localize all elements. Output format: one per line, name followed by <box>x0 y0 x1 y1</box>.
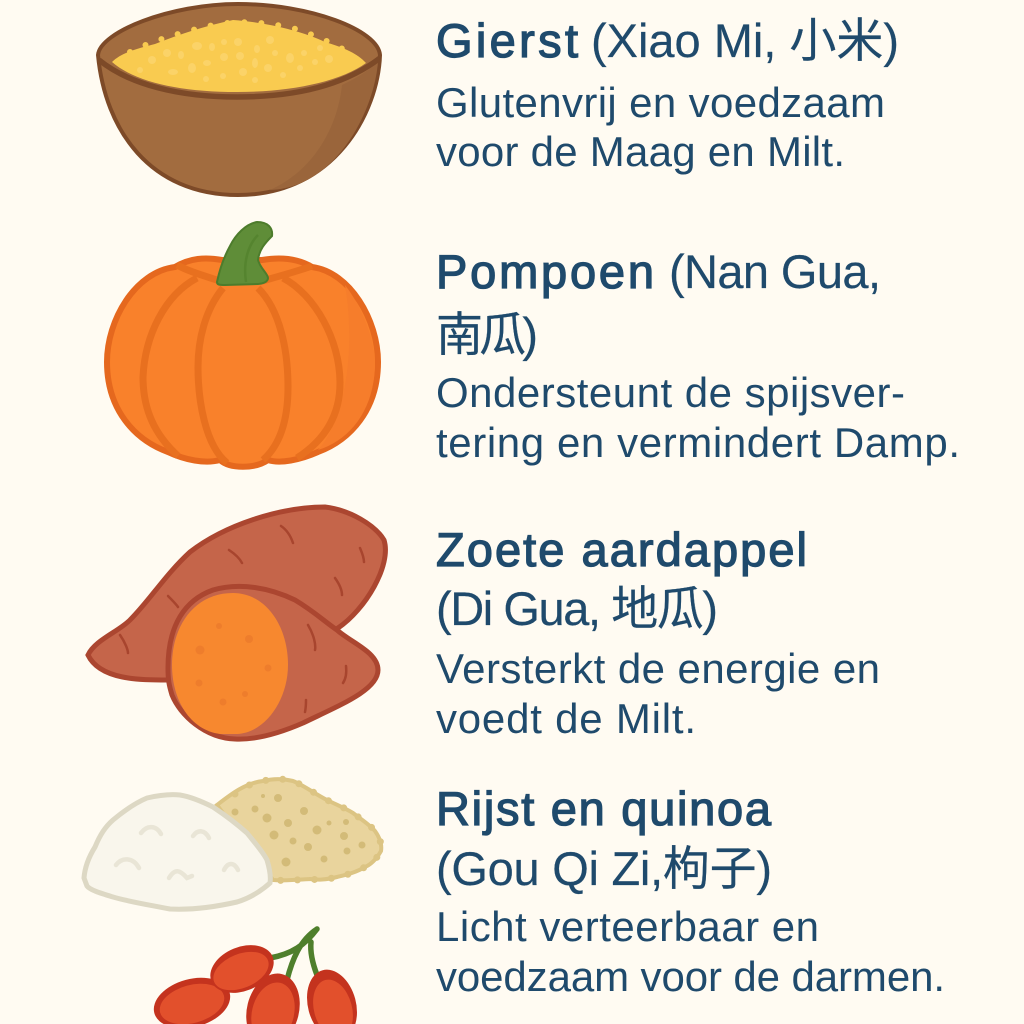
description: sweet potato: Versterkt de energie en <box>436 645 880 692</box>
icon: pumpkin <box>107 222 378 467</box>
icon: millet bowl <box>98 4 380 195</box>
icon: goji berries <box>148 929 364 1024</box>
heading: sweet potato <box>436 523 807 635</box>
heading: sweet potato: (Di Gua, 地瓜) <box>436 582 718 635</box>
heading: rice and quinoa: Rijst en quinoa <box>436 782 772 835</box>
icon: rice pile <box>84 795 270 909</box>
heading: rice and quinoa: (Gou Qi Zi,枸子) <box>436 842 772 895</box>
heading: rice and quinoa <box>436 782 772 895</box>
heading: millet: Gierst <box>436 14 578 67</box>
description: millet: voor de Maag en Milt. <box>436 128 845 175</box>
description: pumpkin: tering en vermindert Damp. <box>436 419 960 466</box>
heading: millet: (Xiao Mi, 小米) <box>591 14 899 67</box>
text block: millet <box>436 14 899 175</box>
description: pumpkin <box>436 369 960 466</box>
description: pumpkin: Ondersteunt de spijsver- <box>436 369 905 416</box>
text block: pumpkin <box>436 245 960 466</box>
heading: pumpkin: 南瓜) <box>436 308 538 361</box>
text block: rice and quinoa <box>436 782 945 1000</box>
heading: pumpkin: Pompoen <box>436 245 654 298</box>
icon: sweet potato <box>88 507 385 739</box>
description: rice and quinoa: Licht verteerbaar en <box>436 903 819 950</box>
heading: pumpkin: (Nan Gua, <box>669 245 881 298</box>
heading: millet <box>436 14 899 67</box>
heading: pumpkin <box>436 245 881 361</box>
description: rice and quinoa <box>436 903 945 1000</box>
description: sweet potato: voedt de Milt. <box>436 695 696 742</box>
text block: sweet potato <box>436 523 880 742</box>
description: sweet potato <box>436 645 880 742</box>
description: rice and quinoa: voedzaam voor de darmen. <box>436 953 945 1000</box>
description: millet <box>436 79 885 175</box>
icon: quinoa pile <box>217 779 381 880</box>
description: millet: Glutenvrij en voedzaam <box>436 79 885 126</box>
heading: sweet potato: Zoete aardappel <box>436 523 807 576</box>
